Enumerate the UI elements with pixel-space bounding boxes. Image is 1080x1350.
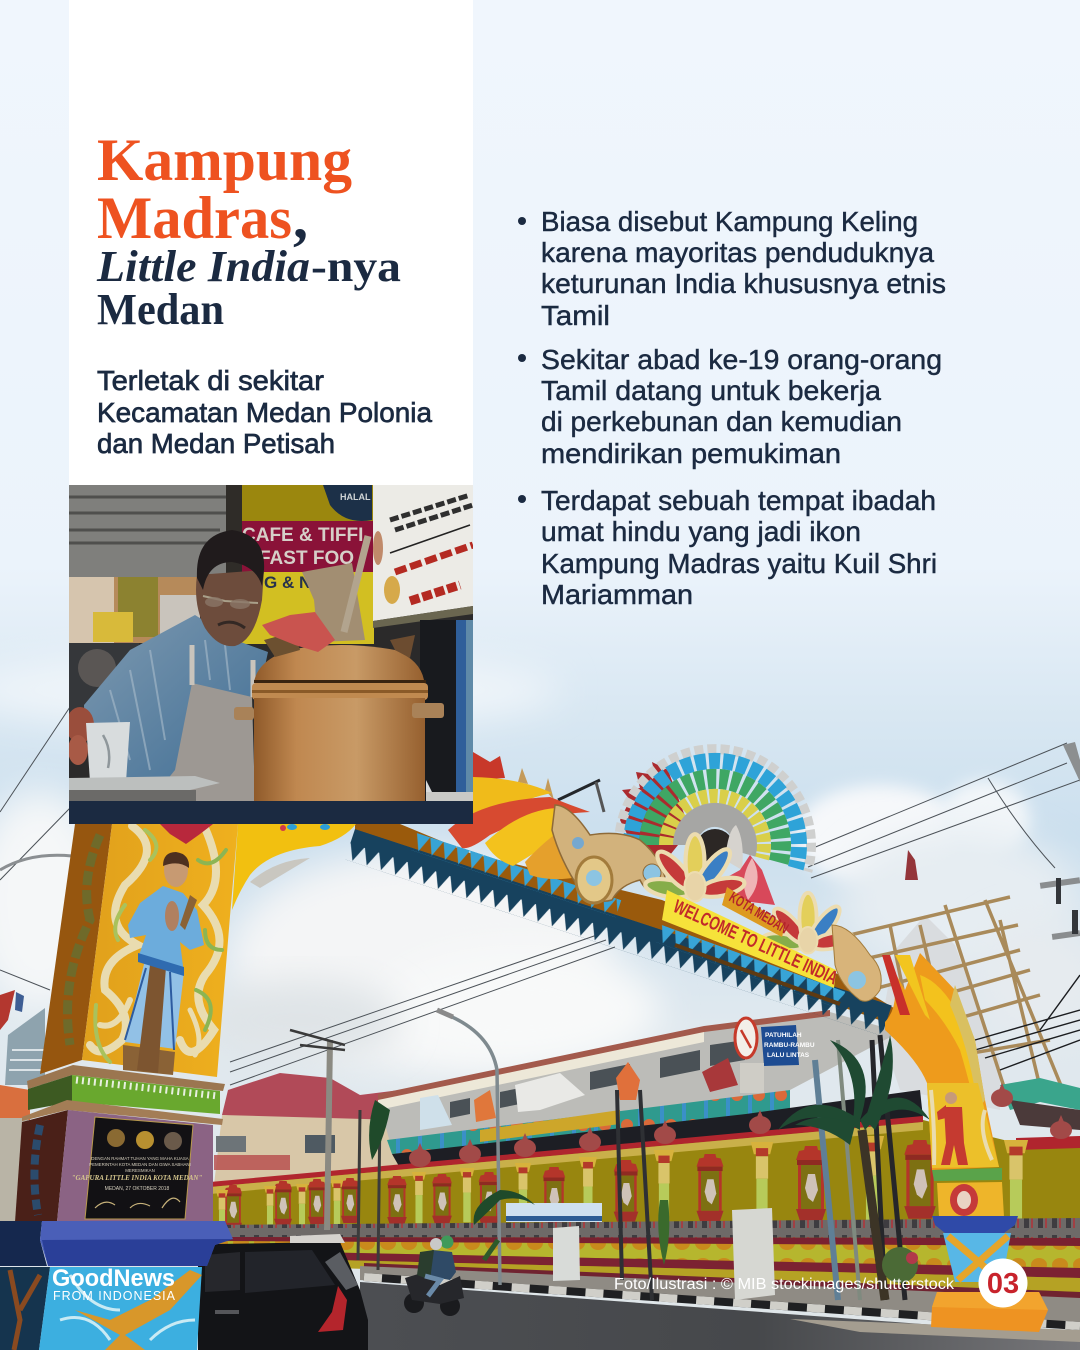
peacock fan ornament — [619, 749, 811, 880]
scaffolded tower — [850, 850, 1062, 1110]
bullet three: Terdapat sebuah tempat ibadah — [541, 485, 936, 516]
photo: tea seller — [66, 485, 473, 801]
street lamp — [437, 1010, 500, 1285]
cafe signboard: CAFE & TIFFI — [242, 525, 363, 546]
title: , — [293, 185, 308, 251]
right arch leg — [882, 953, 1048, 1332]
bullet one: Tamil — [541, 300, 610, 331]
hand and cup — [66, 707, 220, 801]
temple frieze strip — [387, 1078, 1080, 1168]
motorcycle with riders — [404, 1236, 464, 1316]
cafe signboard: FAST FOO — [259, 548, 354, 569]
left background buildings — [0, 990, 45, 1228]
ground: sidewalk, curb and road — [360, 1266, 1080, 1350]
white building behind temple — [378, 1010, 900, 1150]
page number badge — [978, 1258, 1028, 1308]
title — [96, 127, 401, 334]
shop shutter — [69, 485, 242, 577]
apron — [170, 645, 256, 801]
bullet two: Sekitar abad ke-19 orang-orang — [541, 344, 942, 375]
page number badge: 03 — [987, 1268, 1019, 1300]
bullet two: Tamil datang untuk bekerja — [541, 375, 881, 406]
location subtitle: Kecamatan Medan Polonia — [97, 397, 432, 428]
left arch bracket — [232, 824, 356, 910]
bullet two: di perkebunan dan kemudian — [541, 406, 902, 437]
man's head — [196, 530, 264, 646]
sign: KOTA MEDAN: KOTA MEDAN — [726, 889, 791, 937]
sign: welcome to little india — [662, 890, 841, 989]
temple wall — [210, 1083, 1080, 1300]
logo: GoodNews from Indonesia: FROM INDONESIA — [53, 1289, 176, 1303]
left pillar side face — [40, 824, 112, 1074]
pillar ledge and green band — [22, 1065, 225, 1125]
arch wing feathers — [448, 777, 590, 879]
title: Medan — [97, 285, 224, 334]
pillar base with plaque — [15, 1110, 213, 1222]
bullet three: Mariamman — [541, 579, 693, 610]
title: Kampung — [97, 127, 352, 193]
cream scroll ornament with medallions — [552, 805, 667, 903]
bullet two: mendirikan pemukiman — [541, 438, 841, 469]
menu board — [373, 485, 473, 628]
pillar lower painted panel — [0, 1267, 202, 1350]
navy bar under photo — [69, 801, 473, 824]
bullet three — [518, 485, 937, 610]
location subtitle — [97, 365, 432, 459]
photo credit: Foto/Ilustrasi : © MIB stockimages/shutterstock — [614, 1276, 955, 1293]
memorial plaque: PEMERINTAH KOTA MEDAN DAN GIWA SABHANI — [89, 1162, 191, 1167]
sign: welcome to little india: WELCOME TO LITTLE INDIA — [670, 896, 841, 989]
location subtitle: dan Medan Petisah — [97, 428, 335, 459]
statue figure in blue robe — [123, 852, 204, 1075]
cafe signboard: G & N — [264, 573, 311, 592]
bullet list — [518, 206, 946, 610]
bullet one: Biasa disebut Kampung Keling — [541, 206, 918, 237]
lotus ornaments — [644, 834, 881, 1001]
right utility pole — [975, 742, 1080, 1070]
title: -nya — [311, 242, 401, 291]
white content panel — [69, 0, 473, 486]
red-roof building — [214, 1073, 400, 1185]
bullet three: umat hindu yang jadi ikon — [541, 516, 861, 547]
road signs: RAMBU-RAMBU — [764, 1042, 815, 1049]
memorial plaque — [72, 1117, 202, 1219]
man's shirt — [84, 615, 268, 790]
bullet one: keturunan India khususnya etnis — [541, 268, 946, 299]
title: Madras — [97, 185, 292, 251]
overhead wires — [0, 707, 1080, 1085]
parked car — [198, 1234, 368, 1350]
main arch beam — [345, 824, 905, 1036]
title: Little India — [96, 242, 310, 291]
sign: KOTA MEDAN — [722, 887, 791, 937]
bullet one — [518, 206, 946, 331]
left pillar front with floral scrolls — [82, 824, 238, 1077]
bullet one: karena mayoritas penduduknya — [541, 237, 934, 268]
bullet three: Kampung Madras yaitu Kuil Shri — [541, 548, 937, 579]
memorial plaque: MERESMIKAN — [125, 1168, 155, 1173]
utility boxes and banner — [506, 1203, 775, 1300]
poles and palms — [290, 1030, 930, 1300]
right side dark doorway — [420, 620, 473, 801]
road signs — [735, 1018, 815, 1093]
memorial plaque: DENGAN RAHMAT TUHAN YANG MAHA KUASA — [91, 1156, 189, 1161]
road signs: PATUHILAH — [765, 1032, 802, 1039]
food poster — [69, 577, 200, 713]
logo: GoodNews from Indonesia: GoodNews — [52, 1265, 175, 1292]
red flame finials — [473, 752, 604, 812]
bullet two — [518, 344, 942, 469]
memorial plaque: "GAPURA LITTLE INDIA KOTA MEDAN" — [72, 1174, 202, 1182]
cafe signboard: HALAL — [340, 492, 371, 502]
pillar blue cap — [0, 1221, 233, 1266]
copper urn — [234, 536, 473, 801]
cafe signboard — [240, 485, 374, 644]
road signs: LALU LINTAS — [767, 1052, 810, 1059]
memorial plaque: MEDAN, 27 OKTOBER 2018 — [105, 1186, 170, 1192]
location subtitle: Terletak di sekitar — [97, 365, 324, 396]
